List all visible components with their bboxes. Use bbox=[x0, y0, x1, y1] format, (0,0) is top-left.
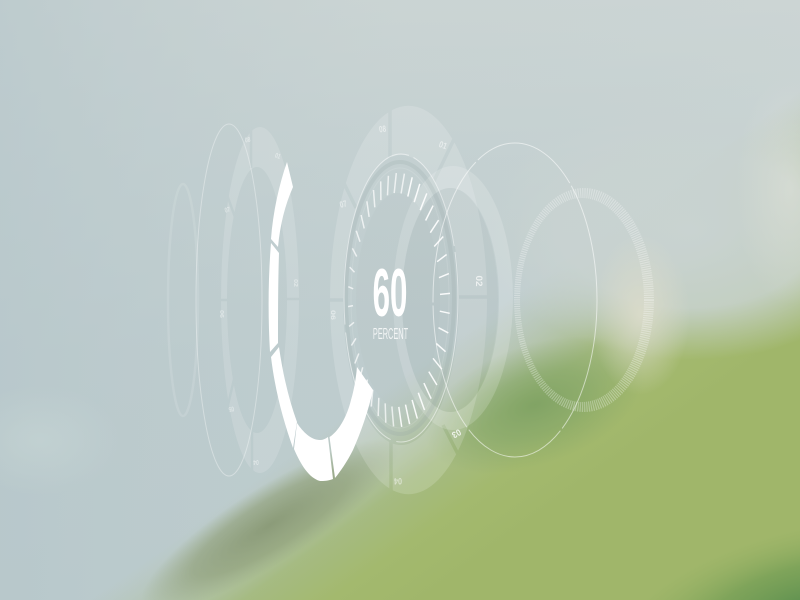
right tick ring bbox=[518, 193, 650, 407]
gauge tick marks bbox=[348, 173, 450, 427]
left ring labels: 01 bbox=[274, 153, 282, 161]
main ring labels: 07 bbox=[339, 198, 348, 210]
left segmented ring bbox=[218, 127, 299, 473]
main ring labels: 08 bbox=[378, 123, 387, 135]
thin right ellipse outline bbox=[433, 143, 597, 457]
left ring labels: 04 bbox=[253, 458, 259, 465]
left ring labels: 05 bbox=[227, 404, 234, 412]
left ring labels: 02 bbox=[292, 279, 298, 287]
main ring labels: 01 bbox=[437, 139, 449, 152]
left side ticks bbox=[348, 173, 404, 426]
overlapping second ring bbox=[393, 166, 513, 430]
main ring labels: 03 bbox=[450, 427, 463, 441]
second ring inner shade bbox=[402, 188, 498, 412]
value 60: 60 bbox=[373, 256, 407, 331]
right side ticks bbox=[399, 177, 450, 427]
far left faint ellipse bbox=[168, 184, 198, 416]
white progress arc bbox=[269, 162, 373, 481]
left ring labels bbox=[218, 137, 298, 465]
main outer segmented ring bbox=[329, 106, 487, 494]
left ring labels: 06 bbox=[218, 310, 224, 318]
gauge bezel rings bbox=[344, 154, 458, 442]
left ring labels: 07 bbox=[224, 207, 232, 215]
main ring labels: 04 bbox=[394, 476, 402, 486]
main ring labels: 06 bbox=[329, 310, 337, 321]
thin left ellipse outline bbox=[196, 124, 262, 476]
percent label: PERCENT bbox=[373, 325, 408, 343]
left ring labels: 08 bbox=[245, 137, 252, 145]
main ring labels bbox=[329, 123, 484, 486]
main ring labels: 02 bbox=[473, 275, 484, 287]
